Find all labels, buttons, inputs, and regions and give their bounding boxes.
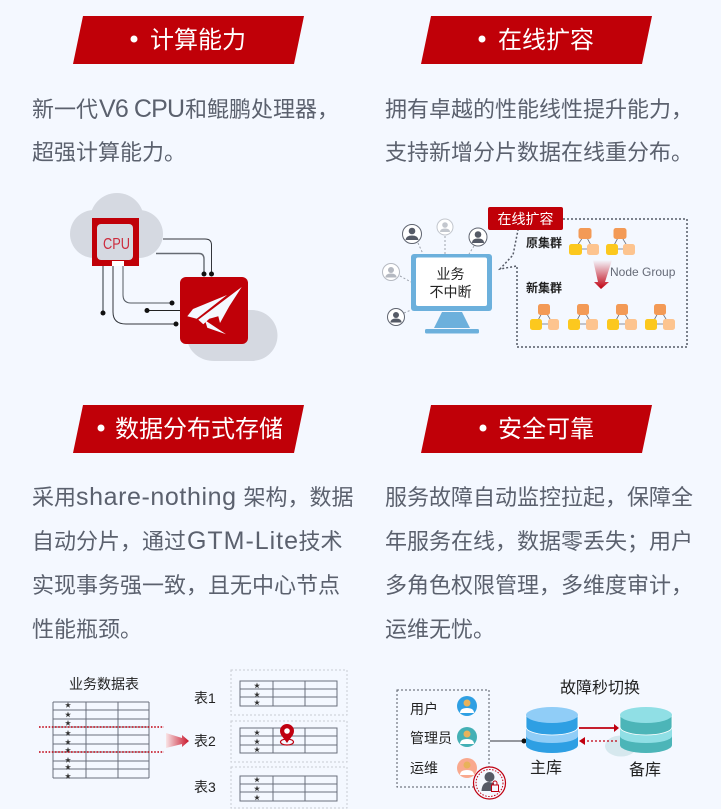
shard 2: ★	[254, 746, 261, 754]
text block: online scaling: 拥有卓越的性能线性提升能力，	[385, 97, 693, 122]
icon: monitor: 业务	[436, 266, 464, 282]
heading: 安全可靠	[421, 405, 652, 453]
heading: 在线扩容: 在线扩容	[498, 27, 594, 54]
text block: distributed storage	[32, 483, 354, 642]
original node groups	[569, 228, 635, 255]
table: business data: ★	[65, 702, 72, 709]
dashed user box	[397, 690, 489, 787]
label: 管理员: 管理员	[410, 730, 452, 746]
label: 表1: 表1	[194, 690, 216, 706]
text block: compute: 超强计算能力。	[32, 140, 186, 165]
arrow: failover return	[579, 737, 617, 745]
arrow: node group	[593, 260, 612, 289]
diagram: online scaling	[382, 207, 687, 347]
arrow: to table 2	[166, 733, 189, 748]
text block: distributed storage: 架构，数据	[244, 485, 354, 510]
icon: standby database	[620, 707, 672, 753]
badge: 在线扩容	[488, 207, 563, 230]
text block: distributed storage: GTM-Lite	[187, 527, 298, 555]
heading: 数据分布式存储: 数据分布式存储	[115, 416, 283, 443]
label: 表2: 表2	[194, 733, 216, 749]
text block: security	[385, 485, 693, 642]
icon: CPU chip: CPU	[103, 236, 130, 253]
shard 1: ★	[254, 692, 261, 698]
label: 原集群: 原集群	[526, 235, 562, 250]
shard 1: ★	[254, 700, 261, 706]
dotted callout border	[500, 219, 687, 347]
heading: 安全可靠: 安全可靠	[498, 416, 594, 443]
icon: monitor	[411, 254, 492, 334]
shard 2	[231, 721, 347, 762]
users	[382, 219, 487, 326]
user dashes	[400, 236, 474, 313]
label: 用户: 用户	[410, 701, 438, 717]
icon: admin avatar	[457, 727, 477, 747]
icon: CPU chip	[92, 218, 139, 266]
table: business data: ★	[65, 757, 72, 764]
label: 业务数据表: 业务数据表	[69, 676, 139, 692]
text block: compute: 新一代	[32, 97, 98, 122]
label: 新集群: 新集群	[526, 280, 562, 295]
icon: cloud left	[70, 193, 163, 258]
icon: monitor: 不中断	[430, 284, 472, 300]
table: business data: ★	[65, 773, 72, 780]
text block: distributed storage: 自动分片，通过	[32, 529, 186, 554]
icon: user avatar	[457, 696, 477, 716]
label: 运维: 运维	[410, 760, 438, 776]
heading: 在线扩容	[421, 16, 652, 64]
shard 3: ★	[254, 794, 261, 802]
table: business data: ★	[65, 730, 72, 737]
arrow: replication	[579, 724, 619, 732]
text block: distributed storage: share-nothing	[76, 483, 236, 511]
label: 表3: 表3	[194, 779, 216, 795]
red dotted selection	[39, 727, 164, 752]
label: 主库: 主库	[530, 759, 562, 777]
shard 2: ★	[254, 738, 261, 746]
text block: security: 年服务在线，数据零丢失；用户	[385, 529, 693, 554]
icon: primary database	[526, 707, 578, 753]
table: business data: ★	[65, 747, 72, 754]
shard 3: ★	[254, 786, 261, 792]
text block: compute: 和鲲鹏处理器，	[185, 97, 339, 122]
text block: distributed storage: 技术	[298, 529, 343, 554]
icon: location pin	[280, 724, 294, 745]
text block: security: 运维无忧。	[385, 617, 495, 642]
icon: ops avatar	[457, 758, 477, 778]
shard 1: ★	[254, 682, 261, 690]
table: business data: ★	[65, 712, 72, 718]
text block: security: 多角色权限管理，多维度审计，	[385, 573, 693, 598]
connector	[490, 738, 526, 744]
heading: 计算能力	[73, 16, 304, 64]
text block: online scaling: 支持新增分片数据在线重分布。	[385, 140, 693, 165]
shard 3: ★	[254, 776, 261, 784]
text block: compute	[32, 95, 339, 165]
label: 备库: 备库	[629, 761, 661, 779]
text block: security: 服务故障自动监控拉起，保障全	[385, 485, 693, 510]
text block: distributed storage: 采用	[32, 485, 76, 510]
icon: red logo tile	[180, 277, 248, 344]
shard 1	[231, 670, 347, 715]
shard 3	[231, 767, 347, 808]
diagram: CPU and Kunpeng chip	[70, 193, 278, 361]
badge: 在线扩容: 在线扩容	[498, 211, 554, 227]
text block: distributed storage: 实现事务强一致，且无中心节点	[32, 573, 340, 598]
text block: online scaling	[385, 97, 693, 165]
heading: 计算能力: 计算能力	[150, 27, 246, 54]
label: 故障秒切换: 故障秒切换	[560, 679, 640, 697]
connector lines	[100, 239, 214, 326]
shard 2: ★	[254, 730, 261, 736]
new node groups	[530, 304, 675, 330]
heading: 数据分布式存储	[73, 405, 304, 453]
icon: lock badge	[474, 767, 506, 799]
table: business data	[53, 702, 149, 780]
icon: cloud right	[187, 298, 278, 361]
text block: distributed storage: 性能瓶颈。	[32, 617, 142, 642]
label: Node Group: Node Group	[610, 265, 676, 279]
table: business data: ★	[65, 764, 72, 771]
text block: compute: V6 CPU	[99, 95, 185, 123]
diagram: data sharding	[39, 670, 347, 808]
shadow under standby	[605, 736, 637, 756]
table: business data: ★	[65, 720, 72, 727]
table: business data: ★	[65, 739, 72, 746]
diagram: failover	[397, 679, 672, 799]
